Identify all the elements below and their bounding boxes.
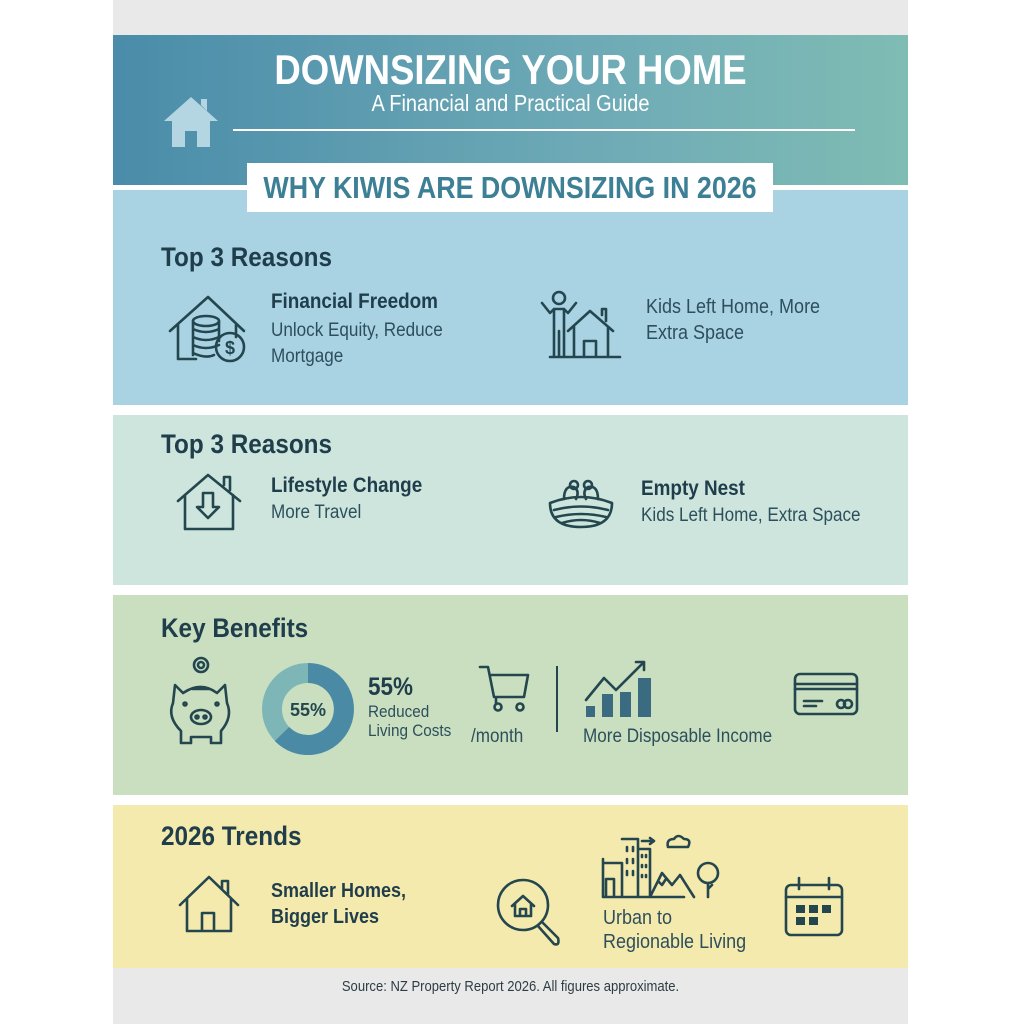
stat: 55% xyxy=(368,673,451,740)
text: kids left home xyxy=(646,296,820,344)
section: key benefits xyxy=(113,595,908,795)
text: financial freedom: Mortgage xyxy=(271,346,343,367)
text: lifestyle: Lifestyle Change xyxy=(271,474,422,497)
heading: 2026 Trends xyxy=(161,821,301,851)
banner xyxy=(247,163,773,212)
text: month: /month xyxy=(471,726,523,747)
text: empty nest: Empty Nest xyxy=(641,477,745,500)
banner: WHY KIWIS ARE DOWNSIZING IN 2026 xyxy=(263,170,757,205)
icon: magnifier xyxy=(496,878,560,946)
text: financial freedom: Unlock Equity, Reduce xyxy=(271,320,443,341)
text: lifestyle xyxy=(271,474,422,523)
text: empty nest: Kids Left Home, Extra Space xyxy=(641,505,861,526)
stat: 55%: 55% xyxy=(368,673,413,701)
icon: house xyxy=(164,97,218,147)
subtitle: A Financial and Practical Guide xyxy=(371,90,650,116)
icon: calendar xyxy=(784,876,844,936)
icon: person house xyxy=(540,290,622,358)
section: trends xyxy=(113,805,908,968)
icon: cart xyxy=(478,666,530,712)
icon: nest xyxy=(548,480,614,528)
title: DOWNSIZING YOUR HOME xyxy=(274,46,747,93)
heading: Top 3 Reasons xyxy=(161,242,332,272)
text: lifestyle: More Travel xyxy=(271,502,361,523)
heading: Top 3 Reasons xyxy=(161,429,332,459)
icon: house xyxy=(178,876,240,932)
footer source: Source: NZ Property Report 2026. All figures approximate. xyxy=(342,978,679,995)
text: kids left home: Kids Left Home, More xyxy=(646,296,820,318)
text: empty nest xyxy=(641,477,861,526)
header xyxy=(113,35,908,185)
icon: house arrow xyxy=(176,474,242,530)
text: urban to regionable: Urban to xyxy=(603,907,672,929)
stat: 55%: Reduced xyxy=(368,702,429,721)
chart: donut xyxy=(262,663,354,755)
icon: house coins xyxy=(168,296,246,362)
text: financial freedom xyxy=(271,290,443,367)
icon: house coins: $ xyxy=(225,338,235,358)
section: top reasons 1 xyxy=(113,190,908,405)
icon: bar chart xyxy=(584,660,651,717)
text: kids left home: Extra Space xyxy=(646,322,744,344)
text: urban to regionable xyxy=(603,907,746,953)
stat: 55%: Living Costs xyxy=(368,721,451,740)
text: urban to regionable: Regionable Living xyxy=(603,931,746,953)
chart: donut: 55% xyxy=(290,700,326,720)
icon: piggy xyxy=(170,656,230,744)
heading: Key Benefits xyxy=(161,613,308,643)
text: smaller homes: Bigger Lives xyxy=(271,906,379,928)
section: top reasons 2 xyxy=(113,415,908,585)
icon: card xyxy=(794,672,858,716)
icon: urban to regional xyxy=(602,834,720,898)
text: smaller homes xyxy=(271,880,406,928)
text: smaller homes: Smaller Homes, xyxy=(271,880,406,902)
text: financial freedom: Financial Freedom xyxy=(271,290,438,313)
text: disposable income: More Disposable Income xyxy=(583,726,772,747)
